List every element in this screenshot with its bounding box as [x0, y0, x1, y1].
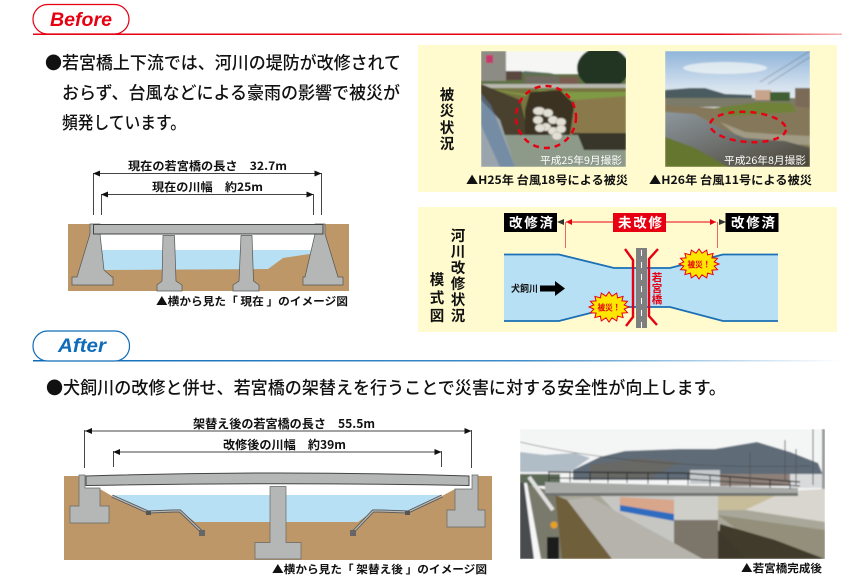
photo: H26 damage: [665, 51, 810, 167]
panel title: 図: [430, 305, 444, 326]
road bridge: [636, 248, 647, 328]
caption H25: ▲H25年 台風18号による被災: [466, 172, 629, 188]
bridge name: 橋: [652, 292, 663, 307]
bridge deck: [94, 224, 323, 234]
ground: [68, 224, 349, 291]
photo: completed bridge: [520, 429, 825, 559]
dimension: bridge length 55.5m: [84, 415, 472, 468]
Before description text: おらず、台風などによる豪雨の影響で被災が: [62, 80, 400, 105]
panel title: 模: [430, 269, 445, 290]
river name and flow arrow: [511, 281, 565, 296]
diagram caption: ▲横から見た「 現在 」のイメージ図: [156, 293, 348, 309]
dimension: bridge length 32.7m: 現在の若宮橋の長さ 32.7m: [128, 158, 287, 174]
left abutment: [72, 224, 113, 285]
Before description text: 頻発しています。: [62, 110, 186, 135]
panel title: 況: [451, 305, 466, 326]
red dashed damage ring 1: [516, 86, 576, 148]
pier 1: [157, 236, 182, 291]
damage burst left: 被災！: [598, 302, 620, 314]
unimproved span markers: [557, 219, 726, 248]
panel title: [430, 225, 466, 326]
Before heading: [33, 4, 842, 35]
dimension: bridge length 55.5m: 架替え後の若宮橋の長さ 55.5m: [193, 415, 375, 432]
damage burst left: [589, 292, 629, 322]
right abutment: [447, 475, 485, 527]
left abutment: [70, 475, 109, 523]
dimension: river width 39m: 改修後の川幅 約39m: [223, 436, 346, 453]
Before description text: [45, 50, 401, 135]
bridge name: [652, 270, 663, 307]
damage burst right: 被災！: [688, 258, 710, 270]
photo caption: ▲若宮橋完成後: [741, 560, 822, 576]
centre pier: [255, 486, 301, 559]
caption H26: ▲H26年 台風11号による被災: [649, 172, 813, 188]
panel title: 修: [451, 273, 466, 294]
photo date 2: 平成26年8月撮影: [724, 152, 806, 167]
label: improved right: 改修済: [731, 212, 776, 232]
ground: [64, 476, 492, 560]
left revetment: [112, 496, 205, 536]
Before heading: Before: [50, 10, 112, 31]
panel title: 状: [451, 289, 466, 310]
dimension: river width 25m: [101, 179, 314, 215]
After description text: ●犬飼川の改修と併せ、若宮橋の架替えを行うことで災害に対する安全性が向上します。: [46, 375, 726, 400]
panel: river improvement schematic: [418, 207, 837, 332]
river shape: [504, 254, 778, 321]
river water: [112, 495, 442, 522]
damage burst right: [679, 249, 719, 279]
diagram caption: ▲横から見た「 架替え後 」のイメージ図: [272, 561, 487, 577]
rebuilt bridge cross-section diagram: [64, 415, 492, 577]
panel title: 状: [440, 117, 455, 138]
After heading: After: [57, 336, 108, 357]
panel title: 況: [440, 133, 455, 154]
panel: damage situation: [418, 45, 837, 192]
red bridge brackets: [625, 249, 658, 326]
bridge name: 若: [652, 270, 662, 285]
panel title: 式: [430, 287, 445, 308]
dimension: river width 39m: [113, 436, 442, 467]
dimension: river width 25m: 現在の川幅 約25m: [152, 179, 263, 195]
right revetment: [350, 496, 442, 536]
photo: H25 damage: [481, 47, 629, 167]
bridge deck: [86, 473, 469, 486]
After heading: [33, 331, 842, 362]
river name and flow arrow: 犬飼川: [511, 281, 538, 295]
photo date 1: 平成25年9月撮影: [540, 152, 622, 167]
label: improved left: 改修済: [509, 212, 554, 232]
right abutment: [303, 224, 343, 285]
current bridge cross-section diagram: [68, 158, 349, 309]
panel title: 被: [440, 84, 455, 105]
dimension: bridge length 32.7m: [93, 158, 322, 215]
label: unimproved: 未改修: [618, 212, 662, 232]
panel title: 災: [440, 100, 455, 121]
panel title: [440, 84, 455, 154]
panel title: 河: [451, 225, 466, 246]
red dashed damage ring 2: [709, 109, 787, 145]
panel title: 改: [451, 257, 466, 278]
river water: [100, 250, 316, 270]
river banks: [504, 254, 778, 321]
Before description text: ●若宮橋上下流では、河川の堤防が改修されて: [45, 50, 401, 75]
panel title: 川: [451, 241, 465, 262]
pier 2: [233, 236, 259, 291]
space under bridge: [84, 475, 474, 496]
bridge name: 宮: [652, 281, 662, 296]
space under bridge: [98, 234, 318, 251]
